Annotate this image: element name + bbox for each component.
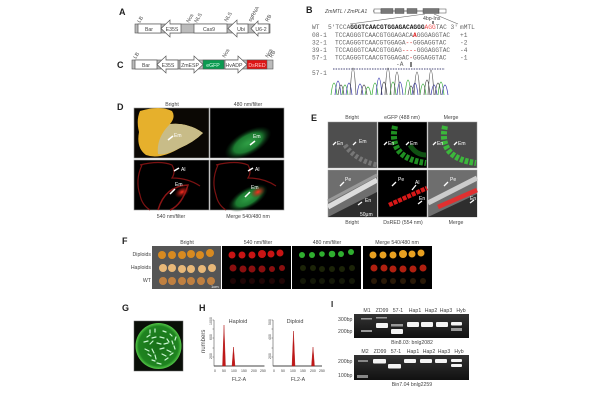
image row: eGFP: Em: [458, 141, 466, 147]
haploid histogram: 200: [251, 369, 257, 373]
panel I: PCR gels: 100bp: [338, 373, 353, 379]
label C: C: [117, 60, 124, 70]
panel I: PCR gels: 200bp: [338, 329, 353, 335]
diploid histogram: 200: [310, 369, 316, 373]
haploid histogram: [209, 317, 266, 383]
panel I: PCR gels: M2: [361, 349, 369, 355]
panel B: target sequence alignment: -1: [460, 54, 468, 62]
panel I: PCR gels: 200bp: [338, 359, 353, 365]
panel B: target sequence alignment: -4: [460, 47, 468, 54]
panel E: confocal images: [311, 113, 477, 226]
panel I: PCR gels: ZD99: [376, 308, 388, 314]
label D: D: [117, 102, 124, 112]
panel I: PCR gels: [331, 300, 469, 388]
haploid histogram: FL2-A: [232, 377, 247, 383]
diploid histogram: FL2-A: [291, 377, 306, 383]
diploid histogram: 200: [268, 353, 272, 359]
panel I: PCR gels: ZD99: [374, 349, 386, 355]
panel F: kernel comparison: [122, 236, 432, 289]
panel C: reporter construct map: eGFP: [206, 63, 220, 69]
panel C: reporter construct map: LB: [133, 51, 141, 60]
haploid histogram: 50: [222, 369, 226, 373]
label E: E: [311, 113, 317, 123]
panel D: embryo fluorescence images: [117, 102, 284, 220]
panel B: target sequence alignment: TCCAGGGTCAACGTGGAGAC-GGGAGGTAC: [335, 54, 447, 62]
panel A: Cas9 construct map: LB: [137, 15, 145, 24]
panel B: target sequence alignment: 5'TCCAGGGTCAACGTGGAGACAGGGAGGTAC 3': [328, 24, 458, 31]
panel I: PCR gels: Hyb: [454, 349, 464, 355]
panel C: reporter construct map: [117, 48, 278, 73]
panel A: Cas9 construct map: E35S: [166, 27, 179, 33]
panel E: confocal images: eGFP (488 nm): [384, 115, 420, 121]
panel C: reporter construct map: Nos: [265, 48, 275, 59]
panel B: target sequence alignment: 57-1: [312, 54, 327, 62]
diploid histogram: 500: [268, 319, 272, 325]
panel F: kernel comparison: 480 nm/filter: [313, 240, 342, 246]
panel F: kernel comparison: Merge 540/480 nm: [375, 240, 419, 246]
panel B: target sequence alignment: TCCAGGGTCAACGTGGAGA--GGGAGGTAC: [335, 40, 447, 46]
panel H: flow cytometry histograms: numbers: [201, 330, 207, 353]
panel I: PCR gels: 300bp: [338, 317, 353, 323]
image: 480 nm: [210, 108, 284, 166]
panel H: flow cytometry histograms: [199, 303, 325, 383]
diploid histogram: 400: [268, 334, 272, 340]
panel E: confocal images: Merge: [449, 220, 463, 226]
diploid histogram: 0: [273, 369, 275, 373]
image row: DsRED: Pe: [398, 177, 404, 183]
panel B: target sequence alignment: -2: [460, 40, 468, 46]
panel B: target sequence alignment: TCCAGGGTCAACGTGGAG----GGGAGGTAC: [335, 47, 450, 54]
panel D: embryo fluorescence images: Merge 540/480 nm: [226, 214, 270, 220]
image: merge: [210, 160, 284, 218]
panel I: PCR gels: Bin8.03: bnlg2082: [391, 340, 433, 346]
panel D: embryo fluorescence images: 480 nm/filter: [234, 102, 263, 108]
panel B: target sequence alignment: WT: [312, 24, 320, 31]
image: merge: Al: [255, 167, 259, 173]
gel: bnlg2082: [354, 314, 469, 338]
image row: eGFP: Em: [359, 139, 366, 145]
panel A: Cas9 construct map: RB: [265, 13, 274, 23]
panel I: PCR gels: Hap1: [407, 349, 419, 355]
diploid histogram: 150: [300, 369, 306, 373]
haploid histogram: 150: [241, 369, 247, 373]
panel I: PCR gels: Hap3: [440, 308, 452, 314]
panel I: PCR gels: Bin7.04 bnlg2259: [392, 382, 432, 388]
haploid histogram: 200: [209, 353, 213, 359]
image: bright kernel: [134, 108, 209, 158]
image row: DsRED: En: [365, 198, 371, 204]
image row: DsRED: Pe: [450, 177, 456, 183]
image row: DsRED: En: [470, 196, 476, 202]
panel C: reporter construct map: RB: [269, 49, 278, 59]
label B: B: [306, 5, 313, 15]
chromatogram: [331, 68, 448, 95]
image row: DsRED: Pe: [345, 177, 351, 183]
panel E: confocal images: Bright: [345, 220, 359, 226]
haploid histogram: 0: [214, 369, 216, 373]
haploid histogram: 600: [209, 334, 213, 340]
panel B: target sequence alignment: 4bp-Ins: [423, 16, 441, 22]
panel A: Cas9 construct map: U6-2: [255, 27, 267, 33]
panel B: target sequence alignment: +1: [460, 32, 468, 39]
label A: A: [119, 7, 126, 17]
panel F: kernel comparison: Diploids: [133, 252, 151, 258]
image row: DsRED: 50μm: [360, 212, 373, 218]
haploid histogram: Haploid: [229, 319, 247, 325]
image: 540 nm: [134, 160, 209, 210]
image row: DsRED: En: [419, 196, 425, 202]
image row: eGFP: En: [437, 141, 443, 147]
panel F: kernel comparison: 540 nm/filter: [244, 240, 273, 246]
haploid histogram: 250: [260, 369, 266, 373]
panel I: PCR gels: Hap2: [423, 349, 435, 355]
panel A: Cas9 construct map: Ubi: [237, 27, 245, 33]
panel A: Cas9 construct map: Cas9: [203, 27, 215, 33]
eGFP box: [203, 60, 224, 69]
diploid histogram: Diploid: [287, 319, 303, 325]
panel B: target sequence alignment: ZmMTL / ZmPLA1: [324, 9, 367, 15]
image row: eGFP: En: [388, 141, 394, 147]
image row: eGFP: En: [337, 141, 343, 147]
diploid histogram: 100: [290, 369, 296, 373]
image: bright kernels: [152, 246, 221, 289]
panel B: target sequence alignment: 39-1: [312, 47, 327, 54]
panel B: target sequence alignment: [306, 5, 475, 95]
image: bright kernel: Em: [174, 133, 182, 139]
panel D: embryo fluorescence images: Bright: [165, 102, 179, 108]
panel I: PCR gels: Hap2: [425, 308, 437, 314]
panel E: confocal images: Merge: [444, 115, 458, 121]
image: 540 nm: Em: [175, 182, 182, 188]
panel B: target sequence alignment: 57-1: [312, 70, 327, 77]
panel A: Cas9 construct map: sgRNA: [248, 5, 261, 23]
panel B: target sequence alignment: mMTL: [460, 24, 475, 31]
panel C: reporter construct map: ZmESP: [181, 63, 199, 69]
panel I: PCR gels: Hap3: [438, 349, 450, 355]
panel A: Cas9 construct map: NLS: [224, 11, 234, 23]
label H: H: [199, 303, 206, 313]
panel I: PCR gels: 57-1: [391, 349, 401, 355]
image: bright kernels: 1cm: [211, 284, 219, 289]
panel G: seedling plate: [122, 303, 183, 371]
panel I: PCR gels: 57-1: [393, 308, 403, 314]
panel I: PCR gels: M1: [363, 308, 371, 314]
panel B: target sequence alignment: TCCAGGGTCAACGTGGAGACAAGGGAGGTAC: [335, 32, 450, 39]
panel C: reporter construct map: Bar: [142, 63, 150, 69]
panel D: embryo fluorescence images: 540 nm/filter: [157, 214, 186, 220]
DsRED box: [247, 60, 267, 69]
panel A: Cas9 construct map: Nos: [186, 13, 196, 24]
image: 480 nm kernels: [292, 246, 361, 289]
image row: DsRED: [328, 170, 477, 218]
haploid histogram: 100: [231, 369, 237, 373]
image row: eGFP: Em: [410, 141, 418, 147]
diploid histogram: 250: [319, 369, 325, 373]
panel B: target sequence alignment: 08-1: [312, 32, 327, 39]
image: 540 nm: Al: [181, 167, 185, 173]
diploid histogram: 50: [281, 369, 285, 373]
label F: F: [122, 236, 128, 246]
panel A: Cas9 construct map: [119, 5, 274, 37]
panel C: reporter construct map: HvADP: [225, 63, 243, 69]
image: 480 nm: Em: [253, 134, 260, 140]
panel C: reporter construct map: DsRED: [248, 63, 266, 69]
panel F: kernel comparison: Bright: [180, 240, 194, 246]
panel C: reporter construct map: Nos: [222, 48, 232, 59]
image row: DsRED: Al: [415, 180, 419, 186]
panel F: kernel comparison: Haploids: [131, 265, 151, 271]
image: merge: Em: [251, 185, 258, 191]
haploid histogram: 1000: [209, 317, 213, 325]
panel B: target sequence alignment: -A: [396, 61, 404, 68]
image: merged kernels: [363, 246, 432, 289]
label G: G: [122, 303, 129, 313]
panel A: Cas9 construct map: Bar: [145, 27, 153, 33]
diploid histogram: [268, 319, 325, 383]
label I: I: [331, 300, 333, 309]
panel B: target sequence alignment: 32-1: [312, 40, 327, 46]
panel E: confocal images: Bright: [345, 115, 359, 121]
image: 540 nm kernels: [222, 246, 291, 289]
gel: bnlg2259: [354, 355, 469, 380]
panel E: confocal images: DsRED (554 nm): [383, 220, 423, 226]
panel I: PCR gels: Hyb: [456, 308, 466, 314]
image row: eGFP: [328, 122, 477, 168]
panel A: Cas9 construct map: NLS: [194, 12, 204, 24]
panel F: kernel comparison: WT: [143, 278, 152, 284]
panel I: PCR gels: Hap1: [409, 308, 421, 314]
panel C: reporter construct map: E35S: [162, 63, 175, 69]
